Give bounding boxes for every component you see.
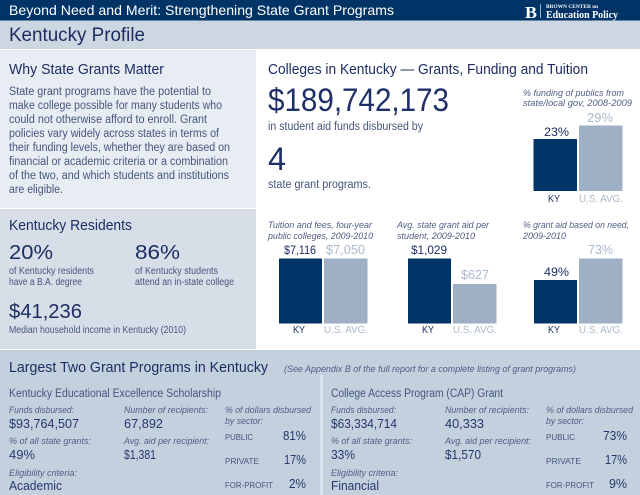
page title band xyxy=(0,20,640,49)
bar chart: average state grant aid: $1,029 xyxy=(411,243,447,257)
bar chart: funding of publics: % funding of publics from xyxy=(523,88,624,99)
bar chart: tuition and fees: public colleges, 2009-2010 xyxy=(267,231,374,242)
bar chart: tuition and fees: KY xyxy=(293,324,305,336)
bar chart: average state grant aid: KY xyxy=(422,324,434,336)
bar chart: funding of publics xyxy=(523,88,633,205)
bar chart: average state grant aid: U.S. AVG. xyxy=(453,324,497,336)
body text: their funding levels, whether they are based on xyxy=(9,142,230,154)
bar chart: funding of publics: KY xyxy=(548,193,560,205)
program: College Access Program (CAP) Grant: Financial xyxy=(331,479,379,493)
stat: student aid funds: $189,742,173 xyxy=(268,82,449,118)
body text: make college possible for many students who xyxy=(9,100,222,112)
heading: Why State Grants Matter xyxy=(9,62,164,78)
body text: financial or academic criteria or a combination xyxy=(9,156,228,168)
stat: state grant programs: 4 xyxy=(268,141,286,177)
program: Kentucky Educational Excellence Scholarship: 49% xyxy=(9,448,35,462)
program: Kentucky Educational Excellence Scholarship: Number of recipients: xyxy=(124,405,208,416)
stat: in-state college: of Kentucky students xyxy=(135,266,218,277)
program: Kentucky Educational Excellence Scholarship xyxy=(9,388,312,493)
program: Kentucky Educational Excellence Scholarship: 17% xyxy=(284,453,306,467)
bar chart: average state grant aid: student, 2009-2010 xyxy=(397,231,476,242)
program: College Access Program (CAP) Grant: 9% xyxy=(609,477,627,491)
body text: of the two, and which students and institutions xyxy=(9,170,229,182)
program: College Access Program (CAP) Grant: PRIVATE xyxy=(546,456,581,466)
body text xyxy=(9,86,230,196)
program: College Access Program (CAP) Grant: 40,333 xyxy=(445,417,484,431)
stat: in-state college: attend an in-state college xyxy=(135,277,234,288)
header bar: Beyond Need and Merit: Strengthening State Grant Programs xyxy=(9,2,394,18)
bar chart: tuition and fees: $7,116 xyxy=(284,243,316,257)
panel: Kentucky residents xyxy=(0,209,256,349)
program: Kentucky Educational Excellence Scholarship: PRIVATE xyxy=(225,456,259,466)
bar chart: grant aid based on need: 2009-2010 xyxy=(522,231,567,242)
body text: are eligible. xyxy=(9,184,63,196)
bar chart: funding of publics: U.S. AVG. xyxy=(579,193,623,205)
program: College Access Program (CAP) Grant: % of all state grants: xyxy=(331,436,412,447)
program: College Access Program (CAP) Grant: $63,334,714 xyxy=(331,417,397,431)
program: Kentucky Educational Excellence Scholarship: % of all state grants: xyxy=(9,436,91,447)
program: College Access Program (CAP) Grant: Eligibility criteria: xyxy=(331,468,398,479)
bar chart: tuition and fees: U.S. AVG. xyxy=(324,324,368,336)
program: Kentucky Educational Excellence Scholarship: $93,764,507 xyxy=(9,417,79,431)
program: Kentucky Educational Excellence Scholarship: Funds disbursed: xyxy=(9,405,74,416)
bar chart: tuition and fees: Tuition and fees, four-year xyxy=(268,220,373,231)
program: Kentucky Educational Excellence Scholarship: % of dollars disbursed xyxy=(225,405,312,416)
bar chart: grant aid based on need xyxy=(522,220,629,336)
bar chart: average state grant aid xyxy=(396,220,497,336)
stat: student aid funds: in student aid funds disbursed by xyxy=(268,121,423,133)
stat: median income xyxy=(9,301,186,336)
program: Kentucky Educational Excellence Scholarship: $1,381 xyxy=(124,448,156,462)
program: College Access Program (CAP) Grant: $1,570 xyxy=(445,448,481,462)
logo: Brown Center on Education Policy: BROWN CENTER on xyxy=(546,5,598,10)
program: College Access Program (CAP) Grant: 17% xyxy=(605,453,627,467)
program: College Access Program (CAP) Grant: PUBLIC xyxy=(546,432,575,442)
program: College Access Program (CAP) Grant: Funds disbursed: xyxy=(331,405,396,416)
stat: student aid funds xyxy=(268,82,449,133)
program: College Access Program (CAP) Grant: Number of recipients: xyxy=(445,405,529,416)
program: Kentucky Educational Excellence Scholarship: Eligibility criteria: xyxy=(9,468,77,479)
program: Kentucky Educational Excellence Scholarship: 81% xyxy=(283,429,306,443)
bar chart: grant aid based on need: % grant aid based on need, xyxy=(523,220,629,231)
heading: Kentucky Residents xyxy=(9,218,132,234)
bar chart: funding of publics: state/local gov, 2008-2009 xyxy=(523,98,633,109)
program: Kentucky Educational Excellence Scholarship: 2% xyxy=(289,477,306,491)
program: Kentucky Educational Excellence Scholarship: Academic xyxy=(9,479,62,493)
program: Kentucky Educational Excellence Scholarship: 67,892 xyxy=(124,417,163,431)
stat: median income: $41,236 xyxy=(9,301,82,323)
stat: B.A. degree: 20% xyxy=(9,242,53,264)
bar chart: average state grant aid: $627 xyxy=(461,268,489,282)
stat: B.A. degree: of Kentucky residents xyxy=(9,266,94,277)
body text: could not otherwise afford to enroll. Grant xyxy=(9,114,208,126)
program: College Access Program (CAP) Grant: % of dollars disbursed xyxy=(546,405,634,416)
panel: largest two grant programs xyxy=(0,350,640,495)
bar chart: grant aid based on need: U.S. AVG. xyxy=(579,324,623,336)
stat: state grant programs: state grant programs. xyxy=(268,179,371,191)
program: College Access Program (CAP) Grant: 73% xyxy=(603,429,627,443)
bar chart: tuition and fees xyxy=(267,220,374,336)
page title band: Kentucky Profile xyxy=(9,25,145,46)
bar chart: grant aid based on need: 49% xyxy=(544,265,569,279)
panel heading: colleges in Kentucky: Colleges in Kentucky — Grants, Funding and Tuition xyxy=(268,62,588,78)
stat: B.A. degree xyxy=(9,242,94,288)
bar chart: funding of publics: 29% xyxy=(587,111,613,125)
program: Kentucky Educational Excellence Scholarship: Kentucky Educational Excellence Scholarship xyxy=(9,388,221,400)
stat: in-state college: 86% xyxy=(135,242,180,264)
body text: policies vary widely across states in terms of xyxy=(9,128,220,140)
bar chart: grant aid based on need: 73% xyxy=(588,243,613,257)
program: Kentucky Educational Excellence Scholarship: Avg. aid per recipient: xyxy=(123,436,209,447)
stat: state grant programs xyxy=(268,141,371,191)
bar chart: funding of publics: 23% xyxy=(544,125,569,139)
panel: why state grants matter xyxy=(0,50,256,208)
program: Kentucky Educational Excellence Scholarship: by sector: xyxy=(225,416,263,427)
program: College Access Program (CAP) Grant: by sector: xyxy=(546,416,584,427)
program: College Access Program (CAP) Grant: Avg. aid per recipient: xyxy=(444,436,531,447)
program: Kentucky Educational Excellence Scholarship: FOR-PROFIT xyxy=(225,480,273,490)
stat: in-state college xyxy=(135,242,234,288)
stat: B.A. degree: have a B.A. degree xyxy=(9,277,82,288)
program: College Access Program (CAP) Grant: College Access Program (CAP) Grant xyxy=(331,388,504,400)
body text: State grant programs have the potential to xyxy=(9,86,211,98)
program: College Access Program (CAP) Grant xyxy=(331,388,634,493)
program: College Access Program (CAP) Grant: 33% xyxy=(331,448,355,462)
note: (See Appendix B of the full report for a complete listing of grant programs) xyxy=(284,364,576,375)
bar chart: tuition and fees: $7,050 xyxy=(326,243,365,257)
logo: Brown Center on Education Policy: Education Policy xyxy=(546,10,619,21)
logo: Brown Center on Education Policy xyxy=(525,3,619,22)
program: College Access Program (CAP) Grant: FOR-PROFIT xyxy=(546,480,594,490)
heading: Largest Two Grant Programs in Kentucky xyxy=(9,359,268,376)
logo: Brown Center on Education Policy: B xyxy=(525,3,537,22)
header bar xyxy=(0,0,640,20)
bar chart: average state grant aid: Avg. state grant aid per xyxy=(396,220,490,231)
stat: median income: Median household income in Kentucky (2010) xyxy=(9,325,186,336)
program: Kentucky Educational Excellence Scholarship: PUBLIC xyxy=(225,432,253,442)
bar chart: grant aid based on need: KY xyxy=(548,324,560,336)
